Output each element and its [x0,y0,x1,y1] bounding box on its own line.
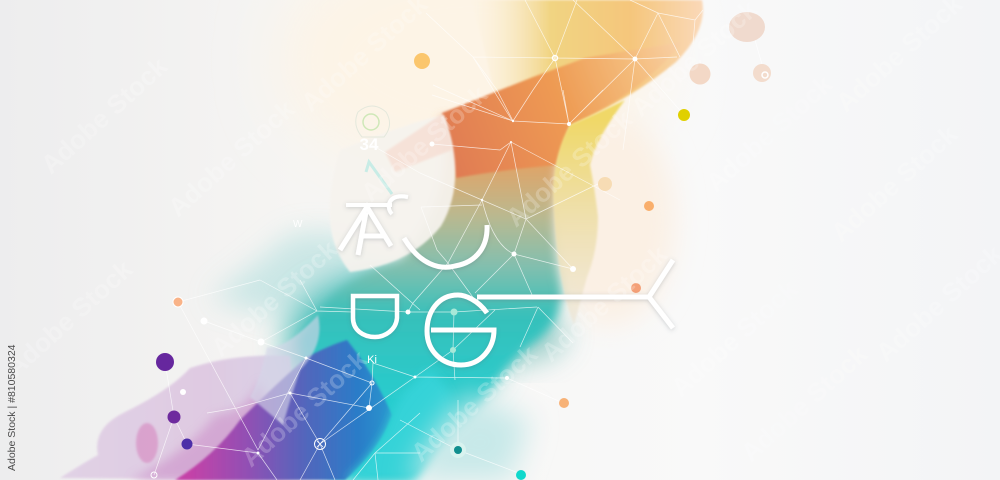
ring node [314,438,326,450]
glyph: G with long arm [427,295,494,365]
watermark: Adobe Stock [35,51,173,180]
small sketch text: W [293,219,303,230]
watermark: Adobe Stock [355,79,493,208]
cream glow [280,0,660,180]
watermark: Adobe Stock [162,94,300,223]
pale peach right glow [545,115,675,325]
deep blue purple wave [175,340,392,480]
small label K: Ki [367,354,377,366]
pale teal wing [210,232,400,340]
soft teal body [285,270,505,420]
white glyph shapes [340,196,673,365]
icon: small gauge with number 34 [356,106,390,154]
pale wedge [330,115,455,272]
network lines [154,0,765,480]
pale aqua foot [410,395,530,480]
translucent lilac fin [250,315,320,425]
watermark: Adobe Stock [205,234,343,363]
orange dots [644,201,654,211]
watermark: Adobe Stock [235,344,373,473]
large orange dot [414,53,430,69]
mauve lower field [130,380,290,480]
long horizontal arm [477,294,648,300]
white nodes [180,56,638,454]
orange band [442,42,682,178]
glyph: D [353,296,397,337]
yellow dot [678,109,690,121]
core column [300,110,570,480]
soft teal fade to right [443,305,567,365]
glyph: U arc [404,225,487,267]
watermark: Adobe Stock [0,254,138,383]
teal dots [516,470,526,480]
watermark: Adobe Stock [405,339,543,468]
panel: colour wash [60,0,703,480]
watermark: Adobe Stock [500,104,638,233]
watermark: Adobe Stock [535,239,673,368]
cyan spill [345,370,453,480]
glyph: A [340,196,408,255]
watermark: Adobe Stock [825,119,963,248]
peach circles [729,12,765,42]
vertical stock credit: Adobe Stock | #810580324 [6,344,18,471]
purple dots [156,353,174,371]
fork end [649,260,673,328]
watermark: Adobe Stock [735,339,873,468]
icon: small gauge with number 34: 34 [360,135,379,154]
watermark: Adobe Stock [700,69,838,198]
magenta petal [136,423,158,463]
translucent yellow ribbon on right [553,100,625,325]
network nodes [151,12,771,480]
arrow: pale teal pointer [366,162,392,194]
watermark: Adobe Stock [665,274,803,403]
upper yellow field [470,0,703,130]
pale pink band over wedge [385,114,452,172]
pale lilac blob [60,356,300,480]
